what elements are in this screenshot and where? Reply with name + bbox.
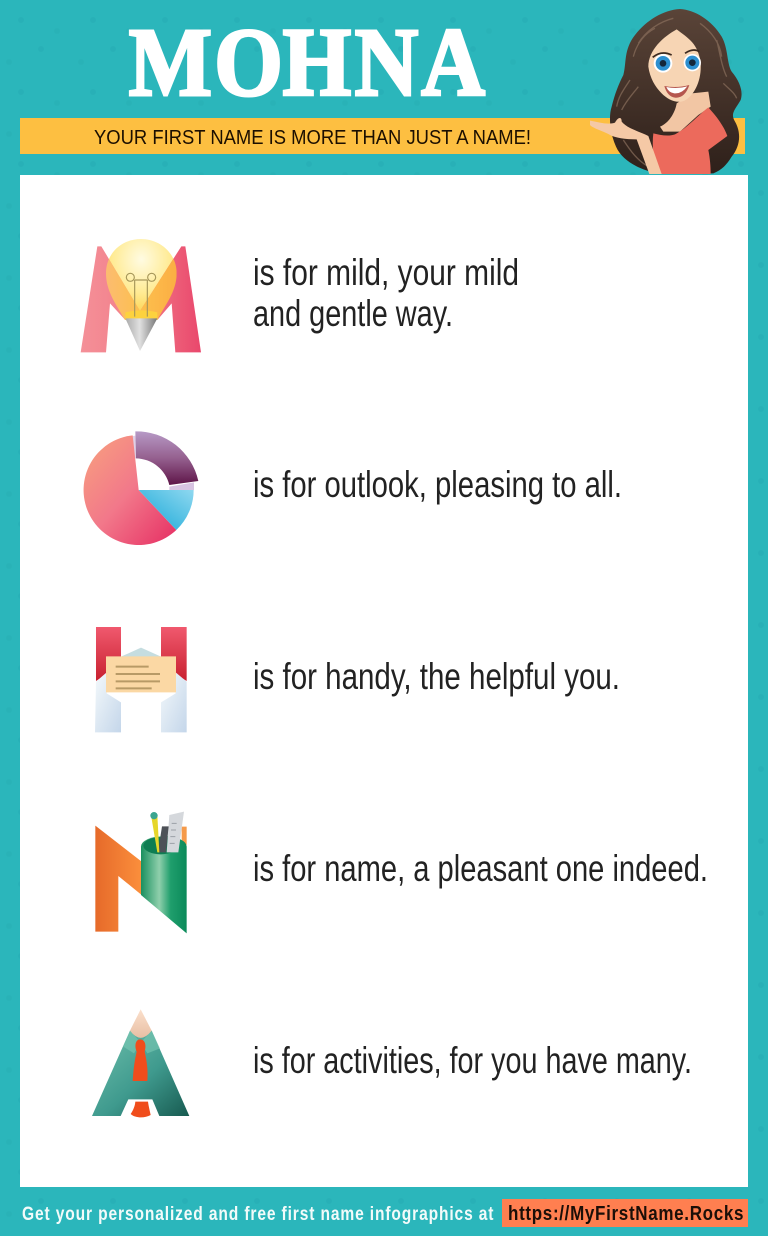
icon: letter H envelope xyxy=(95,627,187,732)
icon: letter M lightbulb xyxy=(81,239,201,352)
title: MOHNA xyxy=(129,9,485,117)
panel: content xyxy=(20,175,748,1187)
banner xyxy=(20,118,745,154)
banner: YOUR FIRST NAME IS MORE THAN JUST A NAME! xyxy=(94,127,531,149)
icon: cartoon woman xyxy=(590,9,742,174)
footer text: Get your personalized and free first name infographics at xyxy=(22,1203,494,1224)
text: O line: is for outlook, pleasing to all. xyxy=(253,464,622,505)
icon: letter O pie chart xyxy=(84,431,198,545)
footer link badge: https://MyFirstName.Rocks xyxy=(508,1202,743,1224)
text: M line: and gentle way. xyxy=(253,293,453,334)
icon: letter A tie xyxy=(92,1009,189,1117)
text: M line: is for mild, your mild xyxy=(253,252,519,293)
icon: letter N pencil holder xyxy=(95,812,187,933)
text: H line: is for handy, the helpful you. xyxy=(253,656,620,697)
